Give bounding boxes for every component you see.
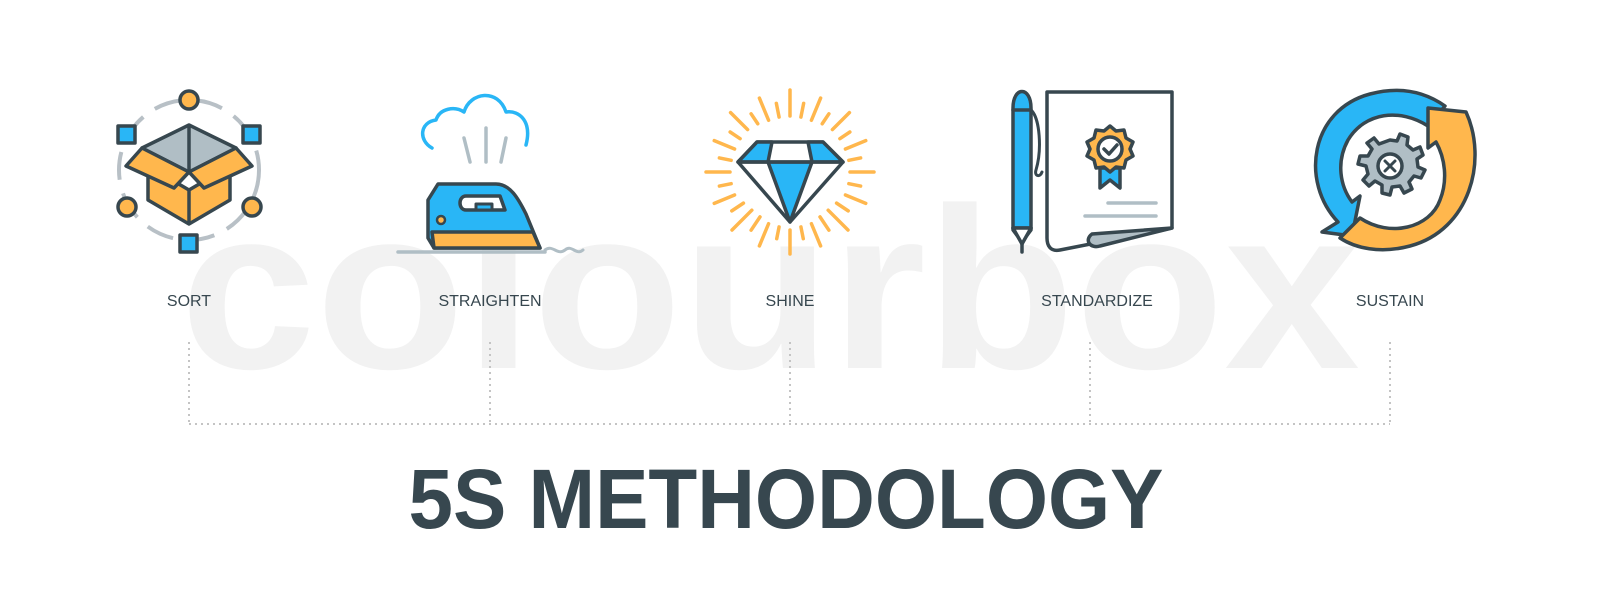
icon: iron (398, 95, 583, 252)
icon: sustain cycle (1316, 90, 1475, 250)
icon: standardize document (1013, 92, 1172, 252)
icon: sort box (118, 91, 261, 252)
label: sort: SORT (167, 293, 211, 310)
label: standardize: STANDARDIZE (1041, 293, 1153, 310)
title: 5S METHODOLOGY (408, 452, 1164, 546)
label: sustain: SUSTAIN (1356, 293, 1424, 310)
connector lines (189, 342, 1390, 424)
label: shine: SHINE (766, 293, 814, 310)
label: straighten: STRAIGHTEN (438, 293, 542, 310)
watermark: colourbox (180, 160, 1360, 417)
icon: diamond (706, 90, 874, 254)
